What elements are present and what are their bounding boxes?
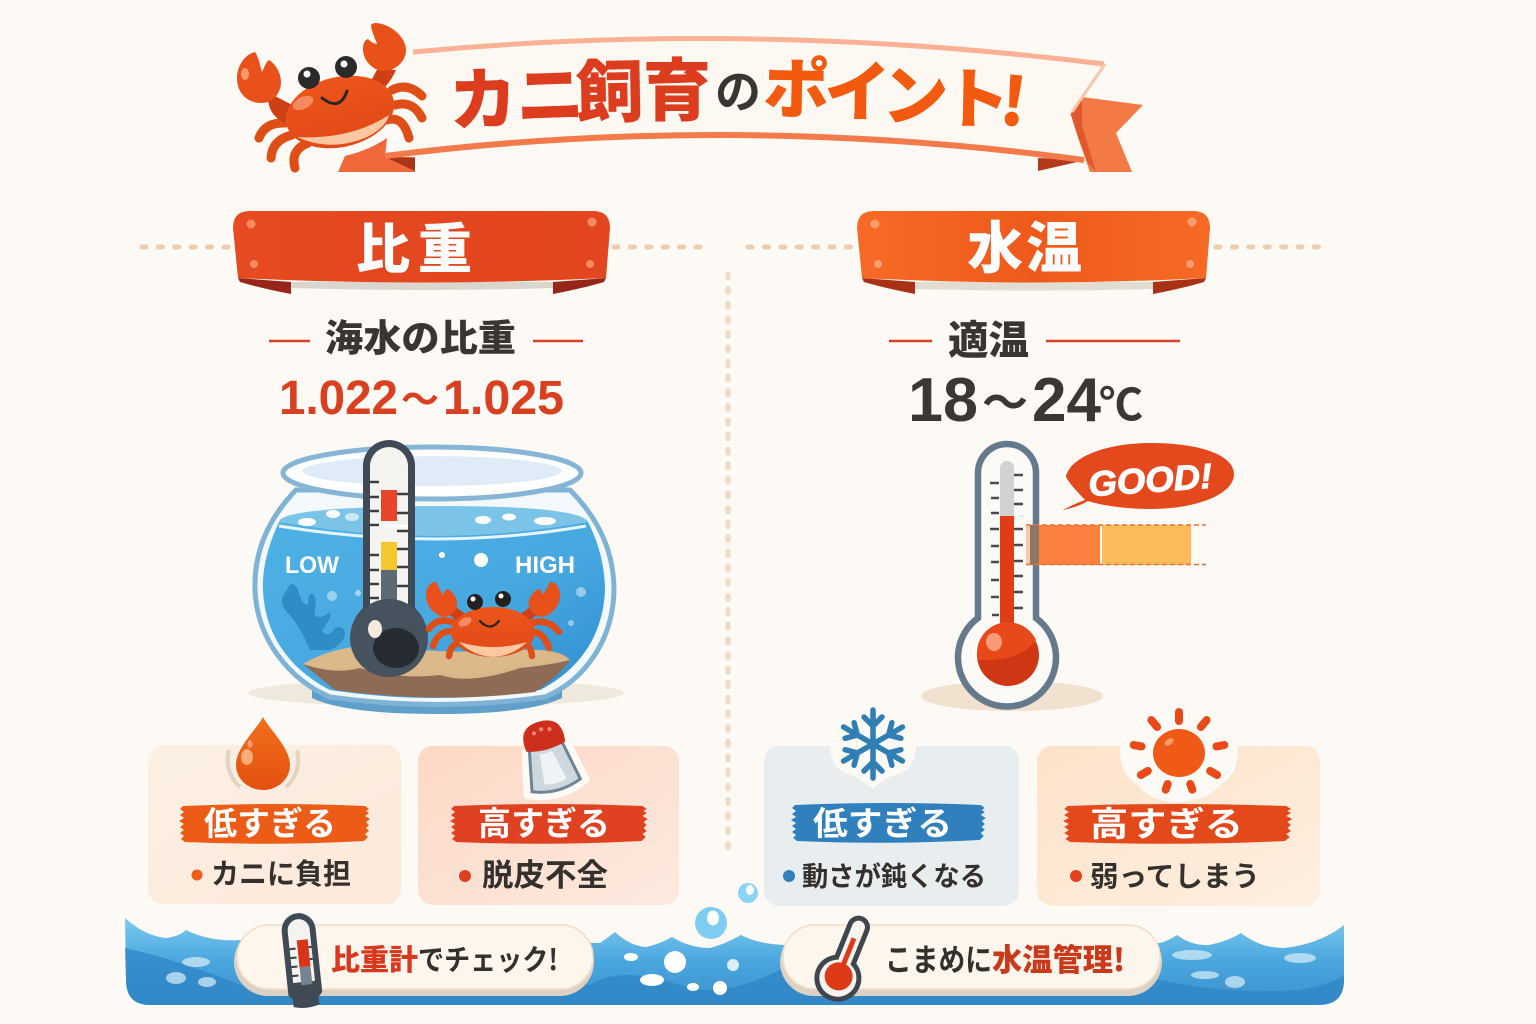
sand (303, 645, 570, 696)
pill (234, 925, 594, 996)
crab smile (322, 91, 347, 104)
card: too cold (764, 705, 1019, 906)
crab belly (297, 115, 389, 145)
card: too low gravity (148, 717, 401, 904)
tag: too high (1063, 797, 1292, 846)
icon: title crab (237, 23, 422, 168)
value: 1.022 to 1.025: ～ (401, 369, 439, 424)
crab in bowl (426, 582, 560, 657)
subheading: optimal temperature: 適温 (948, 308, 1029, 366)
tag: too low (179, 797, 370, 845)
icon: hydrometer (280, 911, 324, 1010)
text: water temperature management: 水温管理! (992, 935, 1125, 980)
value: 1.022 to 1.025: 1.022 (279, 372, 398, 425)
value: 18 to 24 degrees: 24 (1032, 366, 1102, 435)
shadow (248, 679, 624, 707)
icon: sun (1120, 704, 1238, 802)
water band (125, 883, 1344, 1005)
value: 18 to 24 degrees: 18 (908, 366, 978, 435)
bubbles (695, 883, 758, 939)
title: no: の (715, 56, 761, 122)
tag: too high: 高すぎる (1090, 797, 1243, 846)
title text (447, 36, 1032, 147)
card: too hot (1037, 704, 1320, 906)
bullet: weakens: 弱ってしまう (1090, 855, 1260, 895)
LOW label: LOW (285, 552, 339, 579)
card: too high gravity (418, 714, 679, 905)
optimal range bars (1026, 525, 1206, 565)
ribbon top edge (413, 39, 1104, 64)
value: 18 to 24 degrees: ～ (982, 367, 1028, 433)
text: check: でチェック! (418, 937, 558, 979)
value: 1.022 to 1.025: 1.025 (443, 372, 564, 425)
water surface (279, 506, 588, 536)
tag: too low: 低すぎる (204, 797, 336, 845)
illustration: fish bowl with crab and thermometer (248, 440, 624, 714)
bullet: failed molting: 脱皮不全 (482, 850, 608, 895)
icon: thermometer (811, 911, 881, 1006)
heading banner: specific gravity (233, 205, 610, 294)
illustration: thermometer (921, 444, 1103, 711)
value: 1.022 to 1.025 (279, 369, 564, 425)
bulb (977, 622, 1039, 686)
heading banner: water temperature: 水温 (967, 204, 1082, 285)
bowl glass (255, 490, 614, 704)
callout: manage water temperature (780, 911, 1162, 1006)
bowl rim (283, 447, 581, 499)
callout: GOOD (1063, 443, 1234, 510)
panel: water temperature (764, 204, 1320, 906)
icon: snowflake (830, 705, 916, 789)
water (263, 522, 605, 698)
title: crab rearing: カニ飼育 (447, 36, 711, 145)
callout: check with hydrometer (234, 911, 594, 1010)
thermometer glass (958, 444, 1056, 706)
crab claws (237, 52, 281, 103)
title: points: ポイント! (763, 36, 1032, 147)
text: hydrometer: 比重計 (331, 937, 418, 979)
crab arms (268, 68, 396, 124)
mercury unfilled (1000, 461, 1014, 516)
panel: specific gravity (148, 205, 679, 905)
water highlights (166, 950, 1316, 988)
bullet: burden on crab: カニに負担 (211, 851, 351, 893)
subheading: seawater specific gravity: 海水の比重 (325, 308, 516, 362)
shadow (921, 681, 1103, 711)
value: 18 to 24 degrees (908, 366, 1143, 435)
mercury column (1000, 516, 1014, 631)
tag: too high (450, 797, 648, 845)
thermometer (350, 440, 428, 677)
crab legs (259, 87, 422, 168)
ribbon tail right (1038, 97, 1143, 172)
ribbon bottom edge (385, 135, 1084, 160)
title banner (338, 37, 1143, 172)
bubbles (298, 510, 586, 626)
tag: too low (791, 797, 986, 845)
tag: too high: 高すぎる (478, 797, 610, 845)
crab body (279, 66, 401, 158)
crab eyes (298, 56, 357, 89)
text: frequently: こまめに (885, 935, 992, 980)
heading banner: specific gravity: 比重 (356, 205, 472, 284)
callout: GOOD: GOOD! (1087, 457, 1214, 504)
dotted dividers (142, 247, 1322, 848)
value: 18 to 24 degrees: ℃ (1099, 369, 1143, 433)
icon: salt shaker (510, 714, 587, 802)
icon: water drop (228, 717, 298, 790)
tag: too low: 低すぎる (813, 797, 952, 845)
seaweed (282, 584, 345, 650)
HIGH label: HIGH (515, 552, 575, 579)
bowl base (312, 682, 562, 714)
ribbon body (385, 37, 1105, 160)
pill (780, 925, 1162, 996)
bullet: moves sluggishly: 動さが鈍くなる (802, 855, 986, 894)
ribbon tail left (338, 138, 415, 172)
heading banner: water temperature (857, 204, 1210, 294)
ticks (990, 475, 1023, 615)
